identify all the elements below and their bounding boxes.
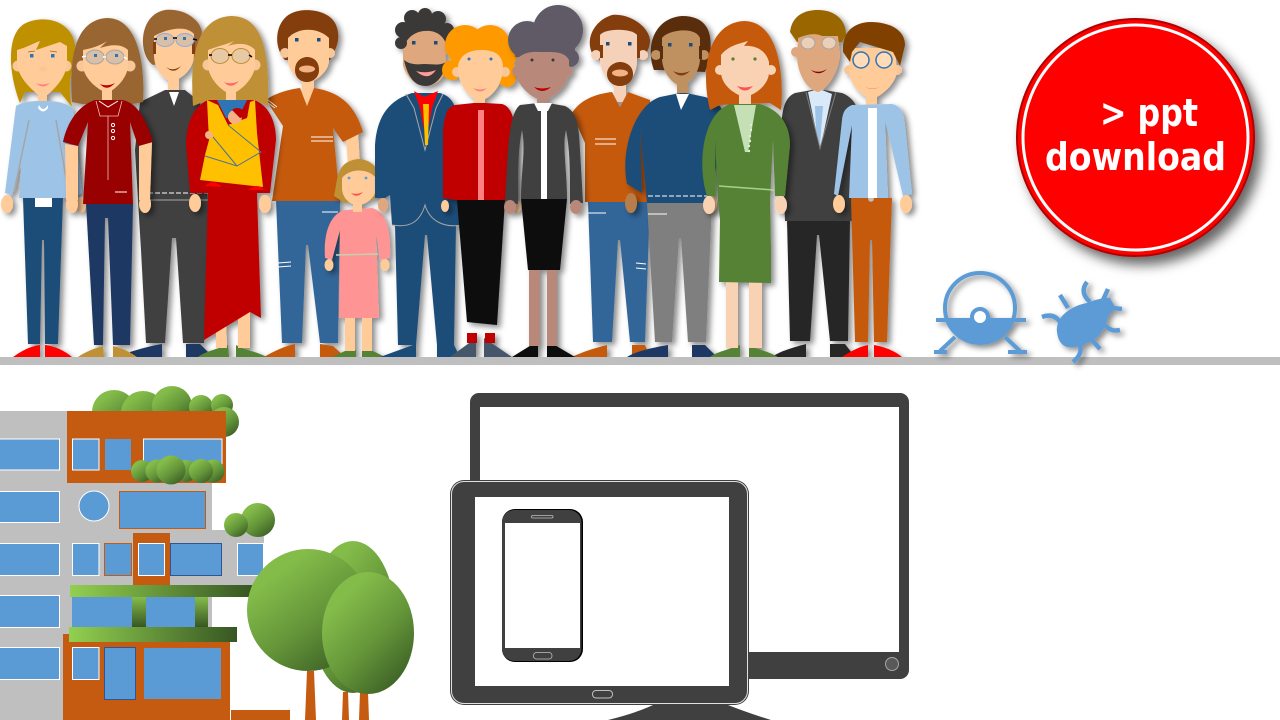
person 3: man in dark grey outfit: [130, 10, 208, 357]
lower windows and planters: [72, 597, 132, 627]
person 11: red-haired woman in green dress: [702, 21, 790, 357]
person 9: bearded man in orange shirt and blue jeans: [572, 15, 652, 357]
large monitor: [470, 393, 909, 679]
windows left column: [0, 439, 264, 680]
person 12: man in dark suit with light blue tie: [772, 10, 858, 357]
person: child in pink dress: [324, 159, 390, 357]
smartphone: [502, 509, 583, 662]
person 1: blonde woman in light blue sweater: [1, 19, 86, 357]
person 4: blonde woman in red dress carrying a baby: [186, 16, 276, 357]
monitor stand: [608, 703, 771, 720]
mid bushes: [131, 456, 224, 484]
button text line 2: download: [1045, 135, 1226, 179]
person 8: woman with grey hair in dark jacket and black skirt: [504, 5, 583, 357]
building: [0, 386, 290, 720]
trees: [247, 541, 414, 720]
person 10: man in navy sweater and grey trousers: [625, 16, 725, 357]
icon: bug: [1042, 282, 1122, 362]
person 2: brown-haired woman in dark red blouse: [63, 18, 153, 357]
person 5: bearded man in orange shirt and jeans: [264, 10, 363, 357]
floor line: [0, 357, 1280, 365]
tablet: [450, 480, 749, 705]
button text line 1: > ppt: [1100, 91, 1198, 135]
person 13: man with glasses in light blue shirt and orange trousers: [833, 22, 912, 357]
button: ppt download: [1016, 18, 1255, 257]
icon: wheel with legs: [934, 273, 1027, 352]
side bushes: [224, 503, 275, 537]
person 7: woman with orange curly hair in red jacket: [441, 25, 521, 357]
bushes on roof: [92, 386, 239, 437]
person 6: bearded man in navy suit: [375, 8, 463, 357]
